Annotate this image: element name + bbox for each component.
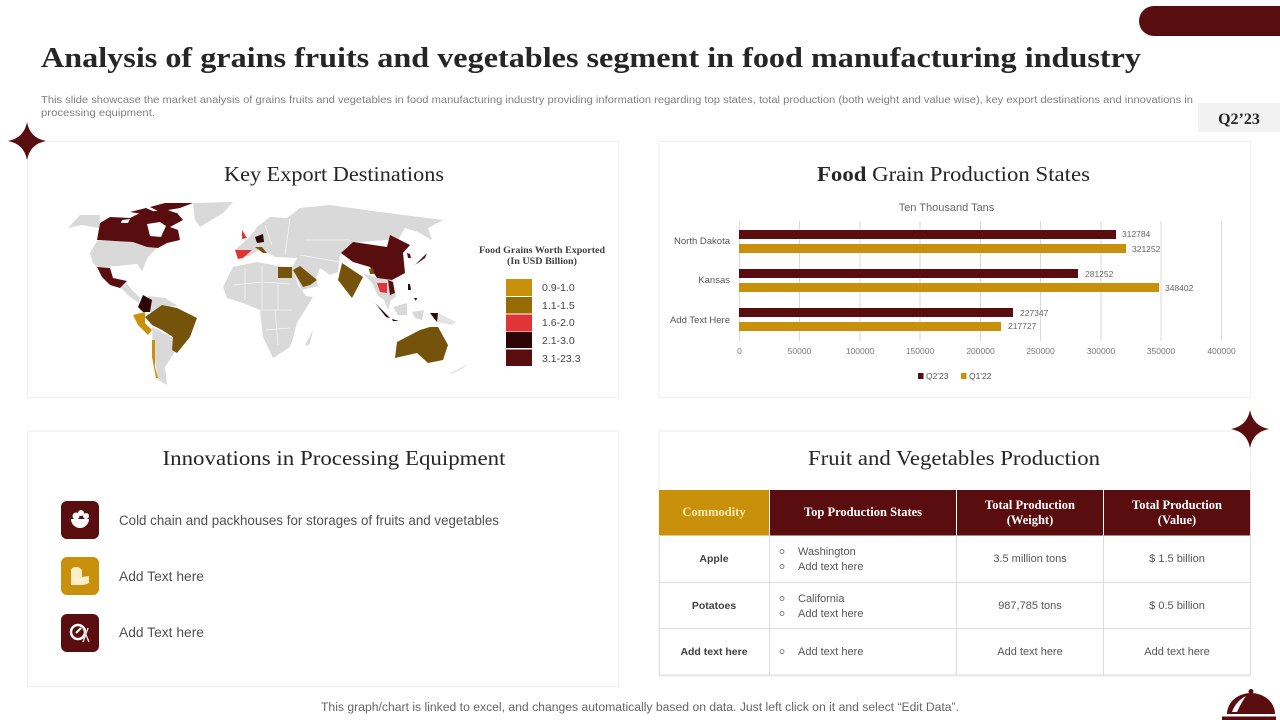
table header: Total Production (1132, 498, 1222, 512)
icon: salad bowl (61, 501, 99, 539)
text: cold chain: Cold chain and packhouses for storages of fruits and vegetables (119, 513, 499, 528)
table (659, 490, 1250, 675)
icon: star top left (8, 122, 46, 160)
bar chart: 0 (737, 346, 742, 356)
table: $ 0.5 billion (1149, 600, 1205, 612)
bar chart: 348402 (1165, 283, 1194, 293)
bar chart: 350000 (1147, 346, 1175, 356)
title: Analysis of grains fruits and vegetables segment in food manufacturing industry (41, 42, 1142, 74)
map legend: Food Grains Worth Exported (479, 246, 606, 256)
bar chart: Q2'23 (926, 371, 949, 381)
subtitle description: processing equipment. (41, 107, 155, 119)
map legend (479, 246, 606, 366)
heading: food grain production states: Food Grain Production States (817, 162, 1090, 186)
bar chart: 321252 (1132, 244, 1161, 254)
bar chart: 200000 (966, 346, 995, 356)
map legend: 1.6-2.0 (542, 317, 575, 329)
icon: star right (1231, 410, 1269, 448)
table: 987,785 tons (998, 600, 1062, 612)
panel: key export destinations (28, 142, 618, 398)
table: Potatoes (692, 600, 736, 612)
heading: fruit and vegetables: Fruit and Vegetables Production (808, 446, 1101, 470)
table: California (798, 593, 845, 605)
map legend: 3.1-23.3 (542, 353, 581, 365)
subtitle description: This slide showcase the market analysis of grains fruits and vegetables in food manufacturing industry providing information regarding top states, total production (both weight and value wise), key export destinations and innovations in (41, 94, 1193, 106)
subtitle description (41, 94, 1193, 119)
table header: Top Production States (804, 505, 922, 519)
bar chart: 50000 (788, 346, 812, 356)
world map (68, 202, 470, 385)
bar chart: 400000 (1207, 346, 1236, 356)
top accent pill (1139, 6, 1280, 36)
table header: Total Production (985, 498, 1075, 512)
bar chart: 100000 (846, 346, 874, 356)
bar chart: 312784 (1122, 229, 1151, 239)
table: Add text here (798, 646, 863, 658)
heading: innovations: Innovations in Processing Equipment (162, 446, 506, 470)
bar chart (670, 202, 1236, 381)
bar chart: Q1'22 (969, 371, 992, 381)
bar chart: 217727 (1008, 321, 1037, 331)
table: Apple (699, 553, 729, 565)
table header (659, 490, 1250, 536)
bar chart: 250000 (1026, 346, 1055, 356)
text: add text 1: Add Text here (119, 569, 204, 584)
text: add text 2: Add Text here (119, 625, 204, 640)
table: Add text here (680, 646, 748, 658)
bar chart: Kansas (698, 275, 730, 286)
map legend: 0.9-1.0 (542, 282, 575, 294)
table: Add text here (1144, 646, 1210, 658)
bar chart: 150000 (906, 346, 934, 356)
quarter tag: Q2’23 (1218, 111, 1260, 128)
table header: Commodity (682, 505, 746, 519)
table: Add text here (798, 608, 863, 620)
table: Add text here (798, 561, 863, 573)
table header: (Value) (1158, 513, 1196, 527)
bar chart: Add Text Here (670, 315, 730, 326)
table: Washington (798, 546, 856, 558)
map legend: 1.1-1.5 (542, 300, 575, 312)
bar chart: 227347 (1020, 308, 1049, 318)
heading: key export destinations: Key Export Destinations (224, 162, 444, 186)
bar chart: Ten Thousand Tans (899, 202, 995, 214)
table header: (Weight) (1007, 513, 1053, 527)
map legend: (In USD Billion) (507, 256, 577, 267)
panel: food grain production states (659, 142, 1250, 398)
bar chart: 281252 (1085, 269, 1114, 279)
bar chart: North Dakota (674, 236, 731, 247)
footer note: This graph/chart is linked to excel, and changes automatically based on data. Just left click on it and select “Edit Data”. (321, 702, 959, 714)
map legend: 2.1-3.0 (542, 335, 575, 347)
table: Add text here (997, 646, 1063, 658)
icon: serving cloche (1222, 689, 1276, 720)
panel: fruit and vegetables production (659, 431, 1250, 676)
icon: packaged food (61, 557, 99, 595)
quarter tag (1198, 103, 1280, 132)
panel: innovations in processing equipment (28, 431, 618, 686)
icon: plate and cutlery (61, 614, 99, 652)
bar chart: 300000 (1087, 346, 1115, 356)
table: 3.5 million tons (993, 553, 1067, 565)
table: $ 1.5 billion (1149, 553, 1205, 565)
